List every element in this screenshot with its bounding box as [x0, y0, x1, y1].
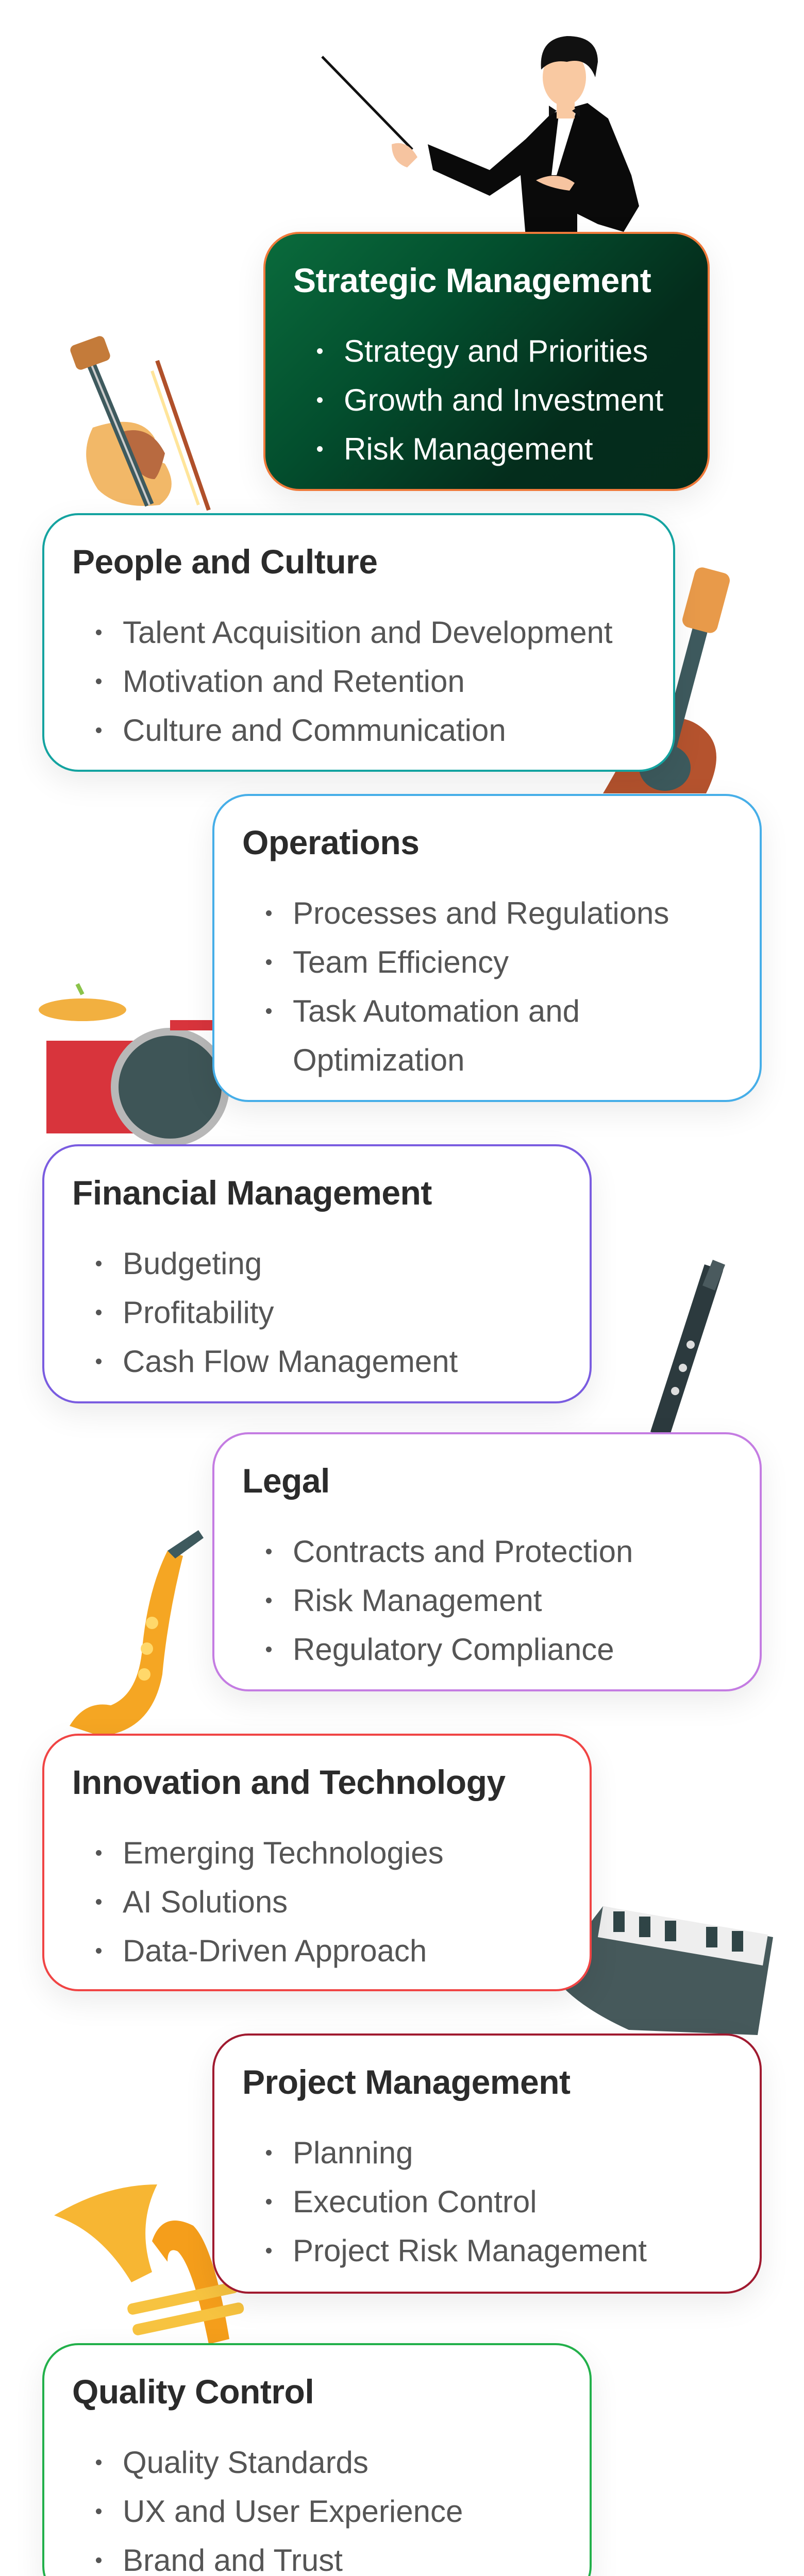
list: financial items: Profitability	[123, 1295, 274, 1330]
illustration: piano	[565, 1906, 773, 2035]
list: financial items: Cash Flow Management	[123, 1344, 458, 1379]
list: financial items: Budgeting	[123, 1246, 262, 1281]
heading: financial management: Financial Management	[72, 1174, 432, 1212]
panel: operations	[212, 794, 762, 1102]
list: innovation items: Emerging Technologies	[123, 1836, 444, 1870]
panel: people and culture	[42, 513, 675, 772]
panel: project management	[212, 2033, 762, 2294]
heading: quality control: Quality Control	[72, 2372, 314, 2411]
list: innovation items: Data-Driven Approach	[123, 1934, 427, 1968]
list: project items: Execution Control	[293, 2184, 537, 2219]
panel: strategic management	[263, 232, 710, 491]
list: people items	[96, 615, 613, 748]
list: strategic items	[317, 334, 663, 466]
list: project items: Planning	[293, 2136, 413, 2170]
illustration: guitar	[603, 567, 730, 793]
illustration: conductor	[321, 36, 639, 232]
illustration: drums	[39, 983, 229, 1144]
list: operations items	[266, 896, 669, 1077]
list: people items: Culture and Communication	[123, 713, 506, 748]
list: quality items: UX and User Experience	[123, 2494, 463, 2529]
list: project items	[266, 2136, 647, 2268]
list: innovation items	[96, 1836, 444, 1968]
list: operations items: Task Automation and Optimization	[293, 994, 580, 1077]
list: quality items: Quality Standards	[123, 2445, 368, 2480]
illustration: saxophone	[70, 1530, 204, 1734]
illustration: trumpet	[54, 2184, 244, 2343]
heading: strategic management: Strategic Management	[293, 261, 651, 299]
illustration: clarinet	[650, 1260, 725, 1432]
list: people items: Talent Acquisition and Development	[123, 615, 613, 650]
panel: quality control	[42, 2343, 592, 2576]
list: operations items: Team Efficiency	[293, 945, 509, 979]
list: strategic items: Strategy and Priorities	[344, 334, 648, 368]
list: legal items: Regulatory Compliance	[293, 1632, 614, 1667]
list: operations items: Processes and Regulations	[293, 896, 669, 930]
list: strategic items: Growth and Investment	[344, 383, 663, 417]
panel: innovation and technology	[42, 1734, 592, 1991]
heading: operations: Operations	[242, 823, 419, 861]
heading: project management: Project Management	[242, 2063, 570, 2101]
list: legal items: Contracts and Protection	[293, 1534, 633, 1569]
list: project items: Project Risk Management	[293, 2233, 647, 2268]
list: people items: Motivation and Retention	[123, 664, 465, 699]
list: innovation items: AI Solutions	[123, 1885, 288, 1919]
list: quality items	[96, 2445, 463, 2576]
illustration: violin	[70, 336, 211, 511]
heading: people and culture: People and Culture	[72, 543, 377, 581]
heading: innovation and technology: Innovation and Technology	[72, 1763, 506, 1801]
list: legal items: Risk Management	[293, 1583, 542, 1618]
list: financial items	[96, 1246, 458, 1379]
panel: financial management	[42, 1144, 592, 1403]
panel: legal	[212, 1432, 762, 1691]
heading: legal: Legal	[242, 1462, 330, 1500]
list: legal items	[266, 1534, 633, 1667]
list: strategic items: Risk Management	[344, 432, 593, 466]
